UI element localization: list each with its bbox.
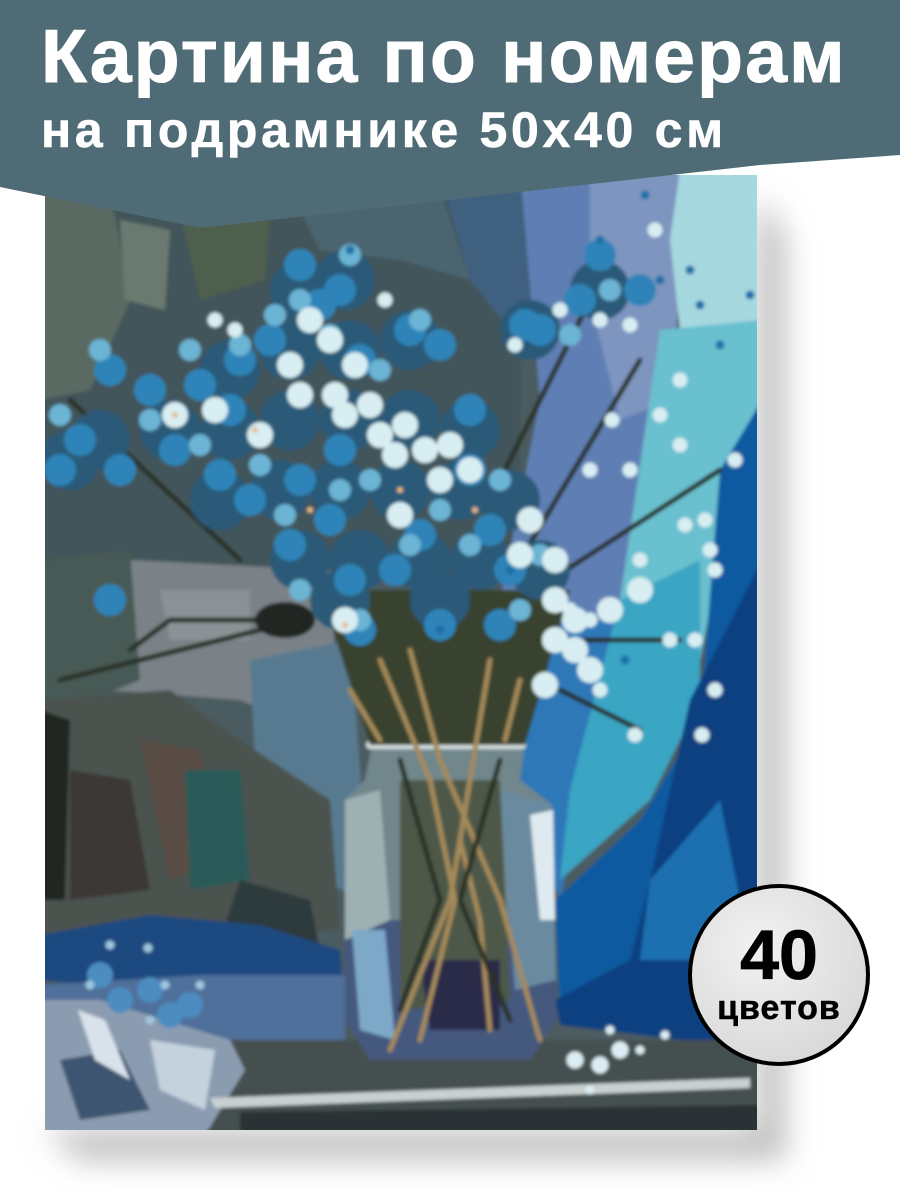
title: Картина по номерам: [41, 14, 847, 98]
small bouquet and fallen blossoms: [90, 945, 665, 1090]
background: right drapery: [500, 170, 762, 1050]
canvas shadow: [45, 195, 785, 1160]
flowers: dark and mid blue mass: [60, 195, 750, 735]
stems: [60, 260, 720, 1050]
vase: [345, 741, 556, 1060]
painting: [40, 170, 762, 1135]
background: grey wall: [45, 192, 532, 944]
cloth and table: [40, 915, 762, 1135]
badge circle: [690, 886, 868, 1064]
subtitle: на подрамнике 50х40 см: [41, 102, 727, 158]
banner: [0, 0, 900, 228]
badge label: цветов: [717, 989, 841, 1027]
badge number: 40: [740, 916, 818, 994]
